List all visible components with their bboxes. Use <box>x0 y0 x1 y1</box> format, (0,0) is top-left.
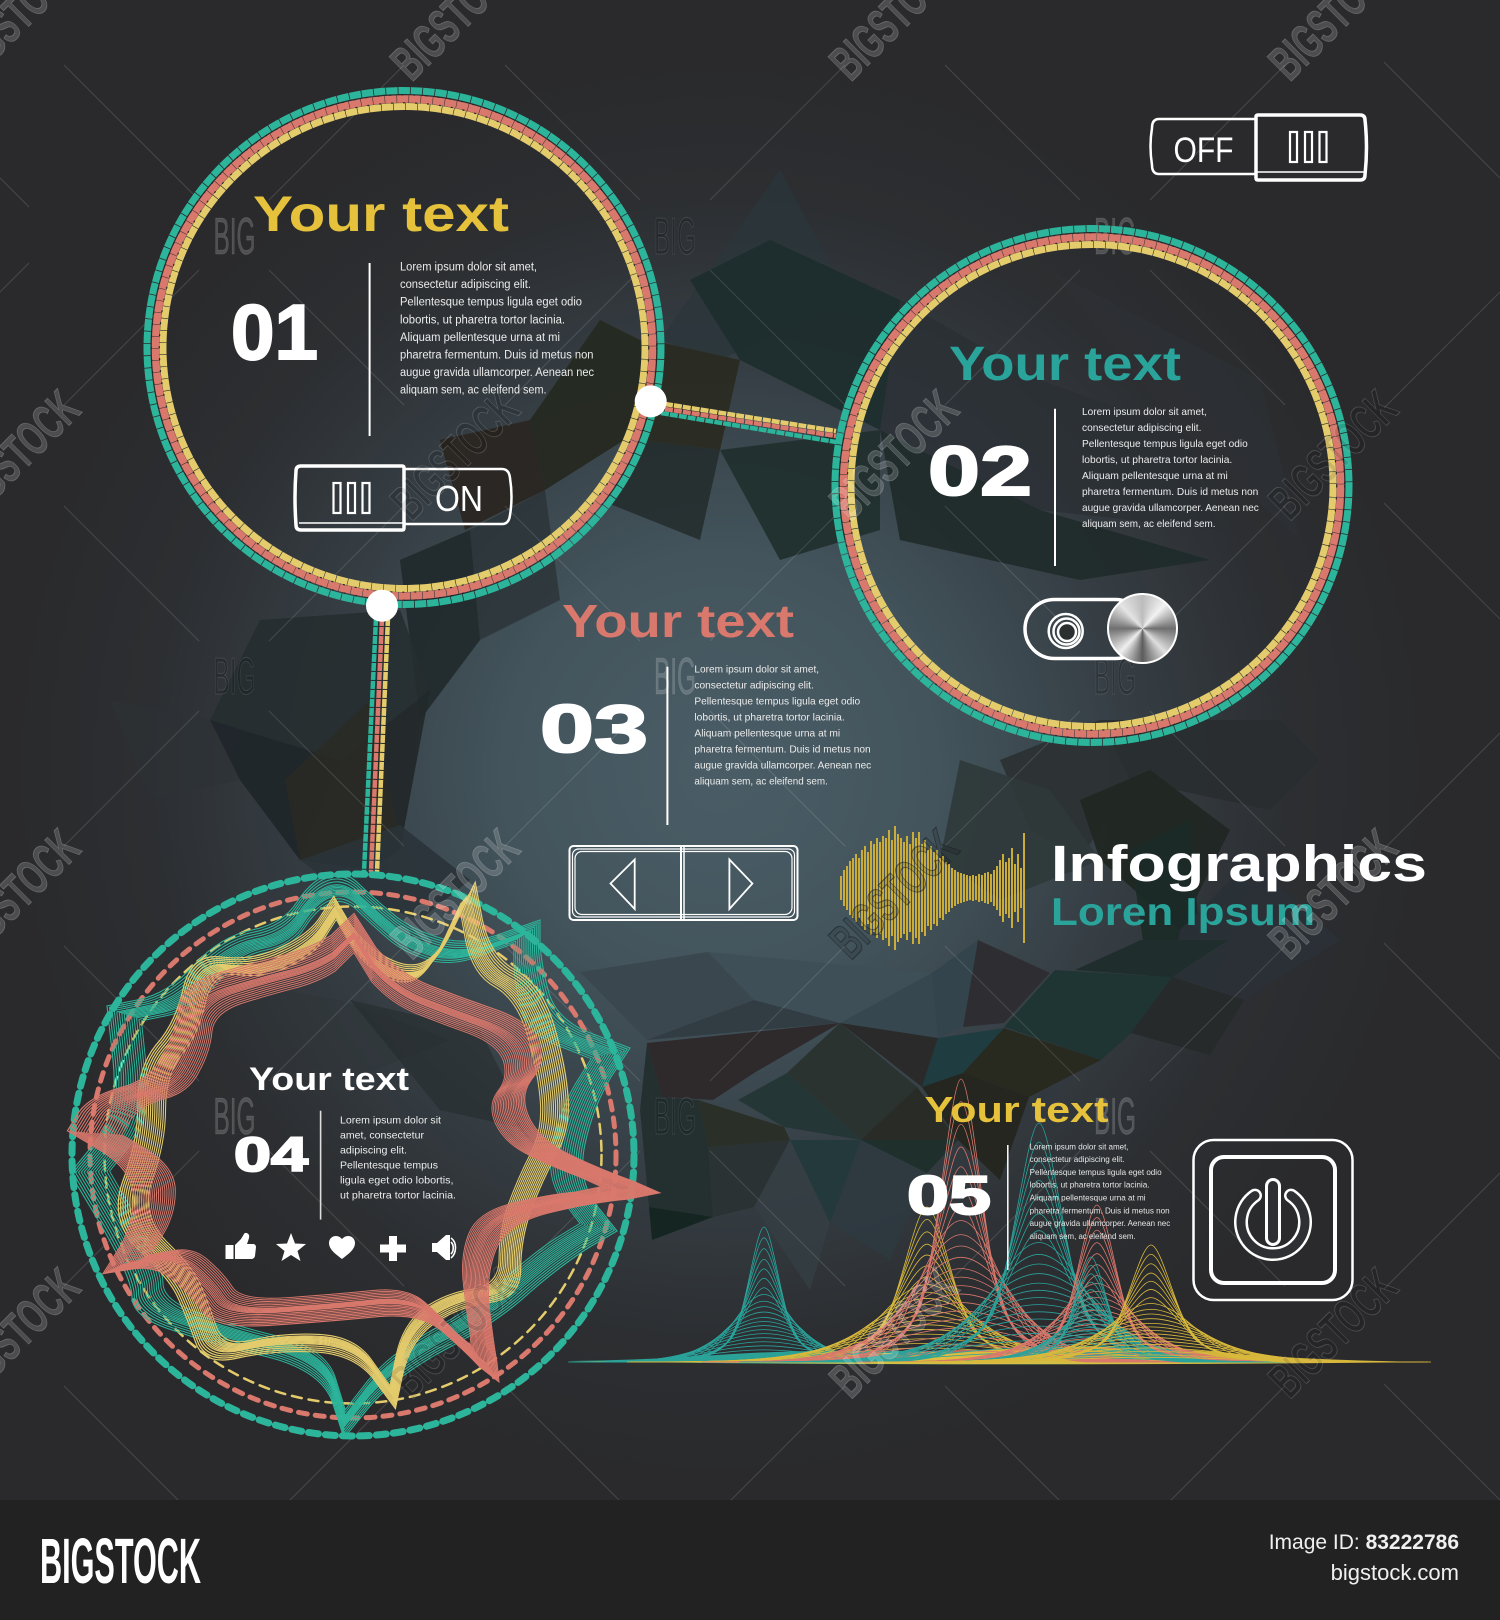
body text: block 05: pharetra fermentum. Duis id metus non <box>1030 1205 1170 1215</box>
watermark BIGSTOCK diagonals: BIGSTOCK <box>819 819 969 969</box>
body text: block 03: consectetur adipiscing elit. <box>694 680 814 692</box>
watermark BIGSTOCK diagonals: BIGSTOCK <box>380 819 530 969</box>
number 01: 01 <box>231 288 318 376</box>
body text: circle 04: Lorem ipsum dolor sit <box>340 1114 441 1126</box>
text: BIG <box>1094 1088 1136 1146</box>
body text: circle 02: Aliquam pellentesque urna at mi <box>1082 470 1228 482</box>
watermark BIGSTOCK diagonals: BIGSTOCK <box>1258 819 1408 969</box>
body text: block 03: Pellentesque tempus ligula eget odio <box>694 696 860 708</box>
body text: block 05: Aliquam pellentesque urna at mi <box>1030 1192 1146 1202</box>
footer bar: BIGSTOCK <box>40 1525 201 1597</box>
body text: circle 04: ligula eget odio lobortis, <box>340 1174 454 1186</box>
wave ring: salmon <box>67 913 660 1382</box>
body text: circle 01: augue gravida ullamcorper. Aenean nec <box>400 367 594 379</box>
watermark BIGSTOCK diagonals: BIGSTOCK <box>1258 1258 1408 1408</box>
watermark BIGSTOCK diagonals: BIGSTOCK <box>380 380 530 530</box>
body text: circle 02: Lorem ipsum dolor sit amet, <box>1082 406 1207 418</box>
wave ring: yellow <box>118 882 568 1409</box>
icon: plus <box>380 1236 406 1261</box>
heading: block 03: Your text <box>562 595 794 647</box>
icon: right arrow <box>729 860 752 909</box>
body text: circle 02: lobortis, ut pharetra tortor lacinia. <box>1082 454 1232 466</box>
body text: block 05 <box>1030 1141 1171 1241</box>
toggle: metal knob <box>1025 592 1178 664</box>
peak: salmon 2 <box>857 1205 1337 1362</box>
body text: block 03: lobortis, ut pharetra tortor lacinia. <box>694 712 845 724</box>
watermark BIGSTOCK diagonals: BIGSTOCK <box>380 1258 530 1408</box>
body text: circle 04: amet, consectetur <box>340 1130 424 1142</box>
watermark BIG marks: BIG <box>654 208 696 266</box>
watermark BIGSTOCK diagonals: BIGSTOCK <box>1258 380 1408 530</box>
body text: circle 01: pharetra fermentum. Duis id metus non <box>400 350 594 362</box>
body text: circle 01: consectetur adipiscing elit. <box>400 279 531 291</box>
peak: yellow 1 <box>627 1207 1227 1362</box>
body text: circle 01: Pellentesque tempus ligula eget odio <box>400 297 582 309</box>
divider <box>1007 1145 1009 1270</box>
divider <box>1054 409 1056 566</box>
wave ring: green <box>70 873 630 1438</box>
watermark BIGSTOCK diagonals: BIGSTOCK <box>819 1258 969 1408</box>
footer url: bigstock.com <box>1331 1560 1459 1585</box>
ring: circle 02 <box>835 228 1349 742</box>
watermark BIG marks: BIG <box>214 648 256 706</box>
body text: block 05: aliquam sem, ac eleifend sem. <box>1030 1231 1136 1241</box>
body text: block 03 <box>694 664 871 788</box>
ring: circle 04 <box>72 874 634 1436</box>
number 05: 05 <box>907 1164 991 1226</box>
icon: star <box>276 1233 306 1261</box>
panel: text block 05 <box>568 1079 1432 1364</box>
number 03: 03 <box>540 691 648 767</box>
body text: circle 04: Pellentesque tempus <box>340 1160 438 1172</box>
peak: teal 1 <box>568 1227 960 1362</box>
body text: block 05: augue gravida ullamcorper. Aenean nec <box>1030 1218 1171 1228</box>
text: BIG <box>1094 208 1136 266</box>
body text: circle 02: aliquam sem, ac eleifend sem. <box>1082 518 1216 530</box>
peak: salmon 1 <box>701 1079 1221 1362</box>
heading: circle 04: Your text <box>249 1061 409 1097</box>
ring: circle 01 <box>147 90 661 604</box>
divider <box>369 263 371 436</box>
body text: block 03: Aliquam pellentesque urna at mi <box>694 728 840 740</box>
watermark BIGSTOCK diagonals: BIGSTOCK <box>819 380 969 530</box>
body text: block 03: Lorem ipsum dolor sit amet, <box>694 664 819 676</box>
joint dot: circle 1 bottom <box>366 590 398 622</box>
watermark BIG marks: BIG <box>214 1088 256 1146</box>
icon: speaker <box>432 1235 456 1260</box>
watermark BIG marks: BIG <box>654 1088 696 1146</box>
body text: circle 01: Lorem ipsum dolor sit amet, <box>400 261 537 273</box>
icon: left arrow <box>610 860 635 909</box>
panel: circle 01 <box>147 90 661 604</box>
body text: circle 02 <box>1082 406 1259 530</box>
peak: teal 2 <box>739 1123 1339 1362</box>
body text: block 05: Lorem ipsum dolor sit amet, <box>1030 1141 1129 1151</box>
body text: circle 02: augue gravida ullamcorper. Aenean nec <box>1082 502 1259 514</box>
toggle: ON <box>295 466 512 530</box>
number 04: 04 <box>234 1129 308 1182</box>
body text: circle 04: ut pharetra tortor lacinia. <box>340 1190 456 1202</box>
low poly background pattern <box>110 170 1340 1290</box>
body text: circle 01 <box>400 261 594 397</box>
base band <box>568 1347 1432 1364</box>
heading: block 05: Your text <box>924 1089 1109 1130</box>
watermark BIG marks <box>214 208 1136 1146</box>
footer bar <box>0 1500 1500 1620</box>
connector: circle 1 to circle 4 <box>364 618 388 872</box>
icons row <box>226 1233 456 1261</box>
panel: circle 04 <box>67 873 660 1438</box>
body text: circle 01: Aliquam pellentesque urna at mi <box>400 332 560 344</box>
subtitle: Loren Ipsum: Loren Ipsum <box>1051 891 1315 934</box>
peak: yellow 2 <box>871 1245 1431 1362</box>
title: Infographics: Infographics <box>1051 835 1427 892</box>
footer image id: Image ID: 83222786 <box>1269 1531 1459 1554</box>
toggle: OFF <box>1150 115 1366 180</box>
panel: circle 02 <box>835 228 1349 742</box>
sound waveform <box>841 826 1024 950</box>
body text: circle 01: aliquam sem, ac eleifend sem. <box>400 385 546 397</box>
body text: circle 01: lobortis, ut pharetra tortor lacinia. <box>400 314 565 326</box>
body text: block 03: aliquam sem, ac eleifend sem. <box>694 776 828 788</box>
body text: block 03: augue gravida ullamcorper. Aenean nec <box>694 760 871 772</box>
joint dot: circle 1 right <box>635 385 667 417</box>
divider <box>666 667 668 825</box>
peak: teal 3 <box>891 1257 1291 1362</box>
number 02: 02 <box>928 432 1032 510</box>
icon: heart <box>329 1236 355 1259</box>
watermark BIG marks: BIG <box>654 648 696 706</box>
body text: circle 02: consectetur adipiscing elit. <box>1082 422 1201 434</box>
panel: text block 03 <box>540 595 871 825</box>
body text: block 05: Pellentesque tempus ligula eget odio <box>1030 1167 1162 1177</box>
toggle: ON: ON <box>435 478 483 519</box>
body text: circle 02: pharetra fermentum. Duis id metus non <box>1082 486 1258 498</box>
connector: circle 1 to circle 2 <box>661 404 836 442</box>
body text: circle 04 <box>340 1114 456 1202</box>
toggle: OFF: OFF <box>1174 131 1234 170</box>
peak chart <box>568 1079 1432 1364</box>
body text: block 05: lobortis, ut pharetra tortor lacinia. <box>1030 1180 1150 1190</box>
body text: block 03: pharetra fermentum. Duis id metus non <box>694 744 871 756</box>
text: BIG <box>1094 648 1136 706</box>
watermark BIG marks: BIG <box>214 208 256 266</box>
body text: circle 04: adipiscing elit. <box>340 1144 407 1156</box>
icon: thumbs up <box>226 1233 256 1259</box>
heading: circle 02: Your text <box>949 338 1181 391</box>
divider <box>320 1111 322 1220</box>
icon: power button <box>1194 1140 1352 1300</box>
body text: block 05: consectetur adipiscing elit. <box>1030 1154 1125 1164</box>
body text: circle 02: Pellentesque tempus ligula eget odio <box>1082 438 1248 450</box>
arrow button <box>570 845 798 921</box>
heading: circle 01: Your text <box>253 186 509 242</box>
